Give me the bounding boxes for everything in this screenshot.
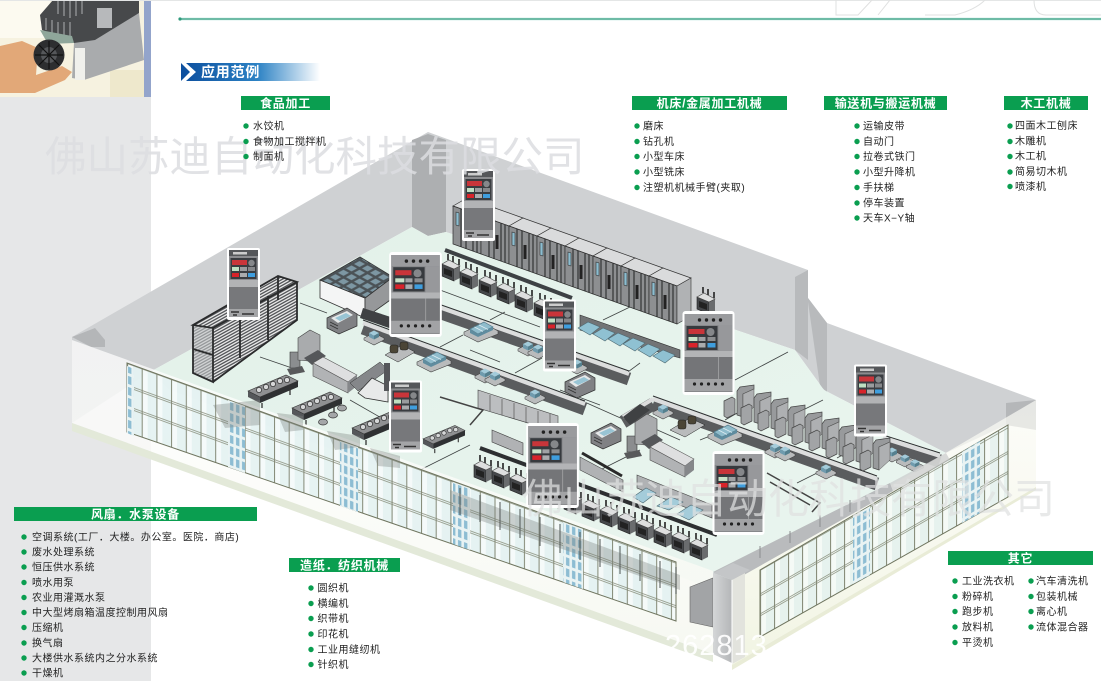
tray block [320, 257, 393, 318]
panel: others: 汽车清洗机 [1036, 574, 1088, 588]
factory building [72, 132, 1036, 670]
panel: woodworking: 四面木工刨床 [1015, 119, 1078, 132]
panel: others: 其它 [1008, 550, 1033, 566]
drive unit 3 [543, 300, 576, 372]
cups on pallets [385, 342, 705, 437]
floor grid lines [260, 290, 857, 483]
panel: conveyors: 自动门 [863, 135, 894, 148]
panel: machine tools: 机床/金属加工机械 [657, 96, 762, 110]
panel: fans and pumps: 风扇．水泵设备 [91, 506, 180, 522]
panel: woodworking: 木工机 [1015, 150, 1046, 162]
panel: others: 跑步机 [962, 605, 994, 618]
panel: others: 离心机 [1036, 605, 1068, 618]
machine row lower [474, 448, 717, 560]
panel: others: 粉碎机 [962, 590, 994, 603]
food rack [193, 276, 297, 382]
panel: machine tools: 小型车床 [643, 150, 685, 163]
panel: fans and pumps: 干燥机 [32, 666, 64, 680]
panel: woodworking: 木工机械 [1021, 96, 1071, 110]
panel: conveyors [824, 96, 947, 224]
panel: paper and textile: 印花机 [318, 628, 349, 640]
panel: machine tools: 注塑机机械手臂(夹取) [643, 181, 745, 194]
front corner pillar [713, 563, 750, 664]
panel: conveyors: 拉卷式铁门 [863, 150, 916, 163]
panel: others: 平烫机 [962, 636, 994, 649]
product photo: hand holding inverter [0, 0, 151, 97]
far right corner pillar [1006, 400, 1036, 430]
panel: fans and pumps: 大楼供水系统内之分水系统 [32, 652, 158, 664]
panel: food processing: 水饺机 [253, 120, 284, 132]
front-right glass wall [713, 400, 1036, 670]
panel: machine tools: 钻孔机 [643, 135, 674, 148]
drive unit 9 [712, 451, 764, 535]
panel: paper and textile: 圆织机 [318, 582, 349, 594]
front-left glass wall [72, 340, 713, 662]
top rule [0, 0, 1101, 21]
robot cells [287, 308, 694, 477]
panel: machine tools: 小型铣床 [643, 166, 685, 178]
panel: food processing [241, 96, 330, 163]
blue boxes on pallets [364, 322, 924, 479]
panel: fans and pumps: 中大型烤扇箱温度控制用风扇 [32, 606, 168, 619]
drive unit 1 [227, 248, 260, 320]
machine row upper [442, 250, 572, 328]
drive unit 7 [682, 311, 734, 395]
panel: paper and textile: 针织机 [318, 658, 349, 671]
drive unit 5 [854, 364, 887, 436]
tall cabinet behind glass [690, 578, 713, 627]
panel: conveyors: 输送机与搬运机械 [835, 96, 936, 110]
panel: others: 工业洗衣机 [962, 574, 1014, 588]
glass tray tables [578, 315, 712, 520]
gray bench blocks [440, 390, 820, 512]
gray side panel [0, 97, 151, 681]
back walls [72, 132, 1036, 453]
panel: paper and textile: 造纸．纺织机械 [300, 558, 389, 572]
panel: conveyors: 手扶梯 [863, 181, 894, 194]
back corner pillar [412, 134, 446, 236]
panel: woodworking: 木雕机 [1015, 134, 1046, 148]
top beam [713, 483, 893, 580]
faint logo outline at top right [836, 0, 1101, 15]
section heading: application examples: 应用范例 [201, 64, 260, 80]
panel: conveyors: 运输皮带 [863, 120, 905, 132]
drive unit 8 [526, 423, 579, 508]
panel: woodworking: 简易切木机 [1015, 165, 1068, 178]
panel: food processing: 食品加工 [260, 96, 311, 110]
panel: paper and textile: 工业用缝纫机 [318, 643, 380, 656]
panel: others: 流体混合器 [1036, 620, 1088, 634]
drive unit 4 [389, 380, 422, 452]
conveyor rails [363, 301, 940, 484]
panel: conveyors: 天车X−Y轴 [863, 212, 915, 224]
panel: fans and pumps [14, 506, 257, 680]
partition row [724, 385, 890, 471]
fan benches [248, 375, 465, 453]
panel: conveyors: 停车装置 [863, 196, 905, 210]
panel: conveyors: 小型升降机 [863, 166, 916, 178]
wall recess column [795, 270, 827, 392]
panel: paper and textile: 横编机 [318, 597, 349, 610]
panel: woodworking [1004, 96, 1088, 193]
panel: machine tools [632, 96, 787, 194]
panel: fans and pumps: 恒压供水系统 [32, 560, 95, 574]
watermark lower: 佛山苏迪自动化科技有限公司 [522, 476, 1055, 522]
panel: others [948, 550, 1093, 649]
panel: paper and textile [289, 558, 400, 671]
machine reflections in glass [213, 400, 680, 594]
panel: woodworking: 喷漆机 [1015, 180, 1046, 193]
panel: others: 包装机械 [1036, 590, 1078, 603]
panel: machine tools: 磨床 [643, 120, 664, 132]
panel: food processing: 食物加工搅拌机 [253, 135, 326, 148]
panel: fans and pumps: 农业用灌溉水泵 [32, 591, 106, 604]
drive unit 2 [462, 169, 495, 241]
watermark phone number: 262813 [665, 630, 768, 662]
panel: fans and pumps: 压缩机 [32, 621, 64, 634]
drive unit 6 [389, 252, 442, 337]
panel: food processing: 制面机 [253, 150, 284, 163]
panel: fans and pumps: 空调系统(工厂．大楼。办公室。医院．商店) [32, 530, 239, 544]
panel: fans and pumps: 喷水用泵 [32, 577, 74, 589]
panel: paper and textile: 织带机 [318, 612, 349, 625]
section heading: application examples [181, 63, 320, 81]
watermark upper: 佛山苏迪自动化科技有限公司 [45, 133, 585, 180]
panel: others: 放料机 [962, 620, 994, 634]
panel: fans and pumps: 废水处理系统 [32, 546, 95, 558]
factory floor [150, 227, 946, 590]
panel: fans and pumps: 换气扇 [32, 636, 64, 650]
cabinets row [453, 198, 715, 324]
tub units [327, 308, 621, 449]
wall corner piece [72, 328, 105, 347]
